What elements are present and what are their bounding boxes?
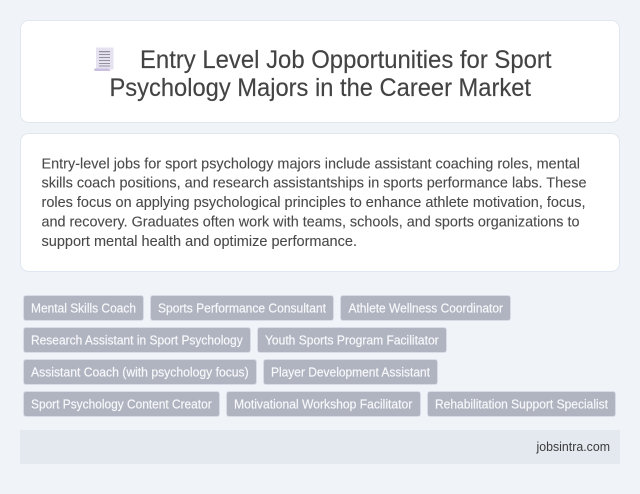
tag: Youth Sports Program Facilitator: Youth Sports Program Facilitator [265, 333, 439, 347]
tag: Assistant Coach (with psychology focus) [24, 360, 256, 384]
tag: Rehabilitation Support Specialist: Rehabilitation Support Specialist [435, 397, 609, 411]
tag: Mental Skills Coach: Mental Skills Coach [31, 301, 136, 315]
footer source text: jobsintra.com [536, 440, 610, 454]
description text: support mental health and optimize performance. [42, 233, 357, 250]
description text [42, 155, 586, 250]
title: Entry Level Job Opportunities for Sport [140, 46, 552, 74]
description text: Entry-level jobs for sport psychology majors include assistant coaching roles, mental [42, 155, 580, 172]
tag: Athlete Wellness Coordinator: Athlete Wellness Coordinator [348, 301, 503, 315]
tag: Assistant Coach (with psychology focus): Assistant Coach (with psychology focus) [31, 365, 249, 379]
tag list [24, 296, 616, 416]
title [110, 46, 552, 102]
tag: Research Assistant in Sport Psychology: Research Assistant in Sport Psychology [31, 333, 243, 347]
description text: and recovery. Graduates often work with teams, schools, and sports organizations to [42, 213, 580, 230]
tag: Mental Skills Coach [24, 296, 144, 320]
tag: Sports Performance Consultant: Sports Performance Consultant [158, 301, 327, 315]
tag: Rehabilitation Support Specialist [428, 392, 616, 416]
tag: Sports Performance Consultant [150, 296, 334, 320]
panel: description [20, 134, 620, 272]
footer [20, 430, 620, 464]
description text: skills coach positions, and research assistantships in sports performance labs. These [42, 174, 586, 192]
description text: roles focus on applying psychological principles to enhance athlete motivation, focus, [42, 194, 586, 211]
panel: title card [20, 20, 620, 122]
title: Psychology Majors in the Career Market [110, 74, 531, 102]
tag: Motivational Workshop Facilitator: Motivational Workshop Facilitator [234, 397, 412, 411]
tag: Sport Psychology Content Creator [24, 392, 220, 416]
tag: Motivational Workshop Facilitator [226, 392, 420, 416]
tag: Player Development Assistant [264, 360, 438, 384]
tag: Research Assistant in Sport Psychology [24, 328, 250, 352]
tag: Sport Psychology Content Creator: Sport Psychology Content Creator [31, 397, 212, 411]
tag: Athlete Wellness Coordinator [340, 296, 510, 320]
tag: Youth Sports Program Facilitator [258, 328, 446, 352]
tag: Player Development Assistant: Player Development Assistant [271, 365, 430, 379]
icon: paper scroll [94, 48, 114, 71]
